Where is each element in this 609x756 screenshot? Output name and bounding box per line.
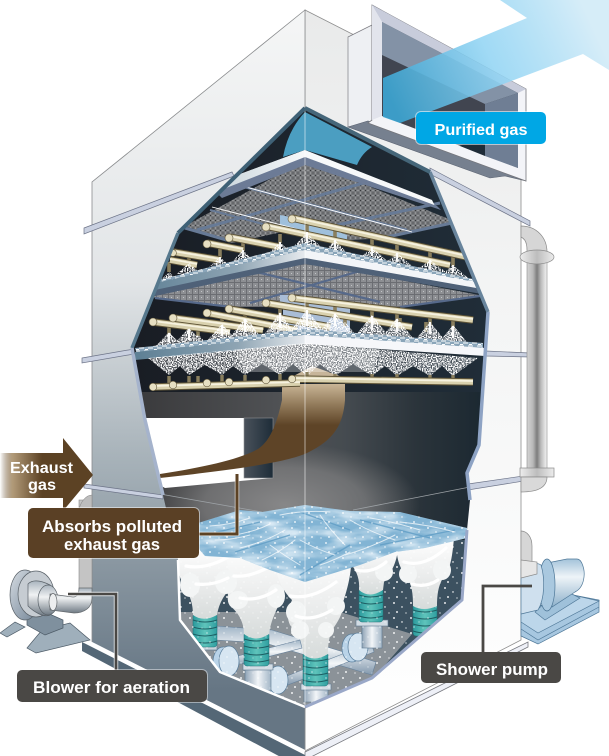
exhaust gas arrow: gas xyxy=(28,477,56,494)
upper tray sprays xyxy=(158,233,468,282)
upper droppers xyxy=(169,222,453,272)
second tray foam xyxy=(160,243,474,282)
blower back disc xyxy=(10,570,40,620)
stack outlet window xyxy=(348,5,526,181)
tan glow above lower pipe xyxy=(294,366,340,376)
blue patch xyxy=(280,215,347,241)
plume highlights xyxy=(186,548,446,618)
outlet side panel xyxy=(348,25,372,127)
blower xyxy=(0,495,92,653)
blower label xyxy=(16,669,208,703)
outlet frame xyxy=(368,5,526,181)
purified gas arrow xyxy=(383,0,609,123)
base line: right side xyxy=(305,642,528,756)
third tray rim xyxy=(135,335,485,360)
building ribs xyxy=(82,168,530,499)
blower outlet elbow xyxy=(50,588,92,613)
upper pipe end caps xyxy=(170,215,296,256)
chamber floor xyxy=(176,612,412,710)
interior back wall xyxy=(142,392,481,560)
upper pipe grid xyxy=(169,217,467,272)
base ledge: left side xyxy=(82,642,305,756)
building: right face xyxy=(305,10,521,751)
riser pipe xyxy=(520,226,554,492)
leader: shower pump label xyxy=(483,586,532,652)
middle blue patch xyxy=(280,295,350,332)
flange valves xyxy=(213,633,368,695)
cutaway interior xyxy=(125,100,495,720)
chamber bubbles xyxy=(178,540,468,705)
center seam xyxy=(304,108,306,707)
middle spray haze xyxy=(156,312,466,346)
second tray rim xyxy=(155,250,482,296)
upper dark chamber xyxy=(134,110,432,392)
diffuser ribs xyxy=(193,595,437,682)
second tray crossbars xyxy=(155,268,480,307)
lower pipe end caps xyxy=(149,375,296,391)
brown polluted gas flow xyxy=(160,384,345,478)
blue duct opening xyxy=(283,112,372,165)
blower pipe top elbow xyxy=(79,495,92,520)
bubbles over plumes xyxy=(178,540,468,705)
rising aeration plumes xyxy=(176,538,454,658)
back corner lines xyxy=(160,487,470,512)
building: left face xyxy=(92,10,305,751)
upper spray cores xyxy=(220,232,453,272)
blower vertical pipe xyxy=(79,500,92,590)
lower spray band xyxy=(148,343,478,376)
tray crossbars xyxy=(185,182,452,241)
blower label: Blower for aeration xyxy=(33,679,190,697)
lower aeration chamber xyxy=(176,538,470,710)
middle tray sprays xyxy=(156,312,467,346)
shower pump label: Shower pump xyxy=(436,661,548,679)
aeration pipes xyxy=(216,626,376,686)
pump flange xyxy=(521,560,537,578)
lower pipe xyxy=(153,378,473,387)
pump casing xyxy=(521,564,544,614)
shower pump label xyxy=(421,652,561,683)
pump feet xyxy=(535,594,580,620)
top mesh tray xyxy=(185,160,456,243)
blower front ring xyxy=(38,585,58,615)
lower pipe droppers xyxy=(167,372,455,383)
absorbs label: exhaust gas xyxy=(64,535,160,554)
shower pump xyxy=(521,531,599,644)
blower inlet collar xyxy=(49,594,57,610)
cutaway wall edge xyxy=(132,108,488,707)
exhaust gas arrow: Exhaust xyxy=(10,460,74,477)
third tray foam xyxy=(135,329,483,354)
pump feed pipe xyxy=(521,531,532,562)
pump motor xyxy=(547,559,584,607)
teal diffusers xyxy=(193,588,437,686)
purified gas label xyxy=(415,111,547,145)
inlet pillar xyxy=(244,418,273,478)
middle spray cores xyxy=(169,310,453,342)
absorbs label xyxy=(27,507,200,559)
outlet sill xyxy=(348,121,526,181)
plume cloud lobes xyxy=(180,560,451,639)
purified gas label: Purified gas xyxy=(434,122,528,139)
leader: blower label xyxy=(68,594,116,670)
exhaust gas arrow xyxy=(0,438,93,511)
diffuser pedestals xyxy=(193,620,388,702)
lower wall glow xyxy=(164,451,412,522)
pump base xyxy=(521,595,599,644)
dark water lines xyxy=(205,512,455,575)
pump ring xyxy=(539,559,555,611)
outlet interior xyxy=(382,22,518,168)
water flecks xyxy=(198,505,467,582)
absorbs label: Absorbs polluted xyxy=(42,517,182,536)
leader: absorbs label xyxy=(199,474,237,534)
foam streaks xyxy=(210,511,455,565)
middle pipe grid xyxy=(153,297,473,336)
middle pipe end caps xyxy=(149,294,296,326)
top tray rim xyxy=(208,150,441,210)
blower feet xyxy=(0,612,90,653)
white inlet opening xyxy=(140,418,273,488)
second mesh tray xyxy=(150,262,484,307)
water surface xyxy=(198,505,467,582)
blower body xyxy=(28,581,50,616)
blower middle housing xyxy=(18,571,54,617)
